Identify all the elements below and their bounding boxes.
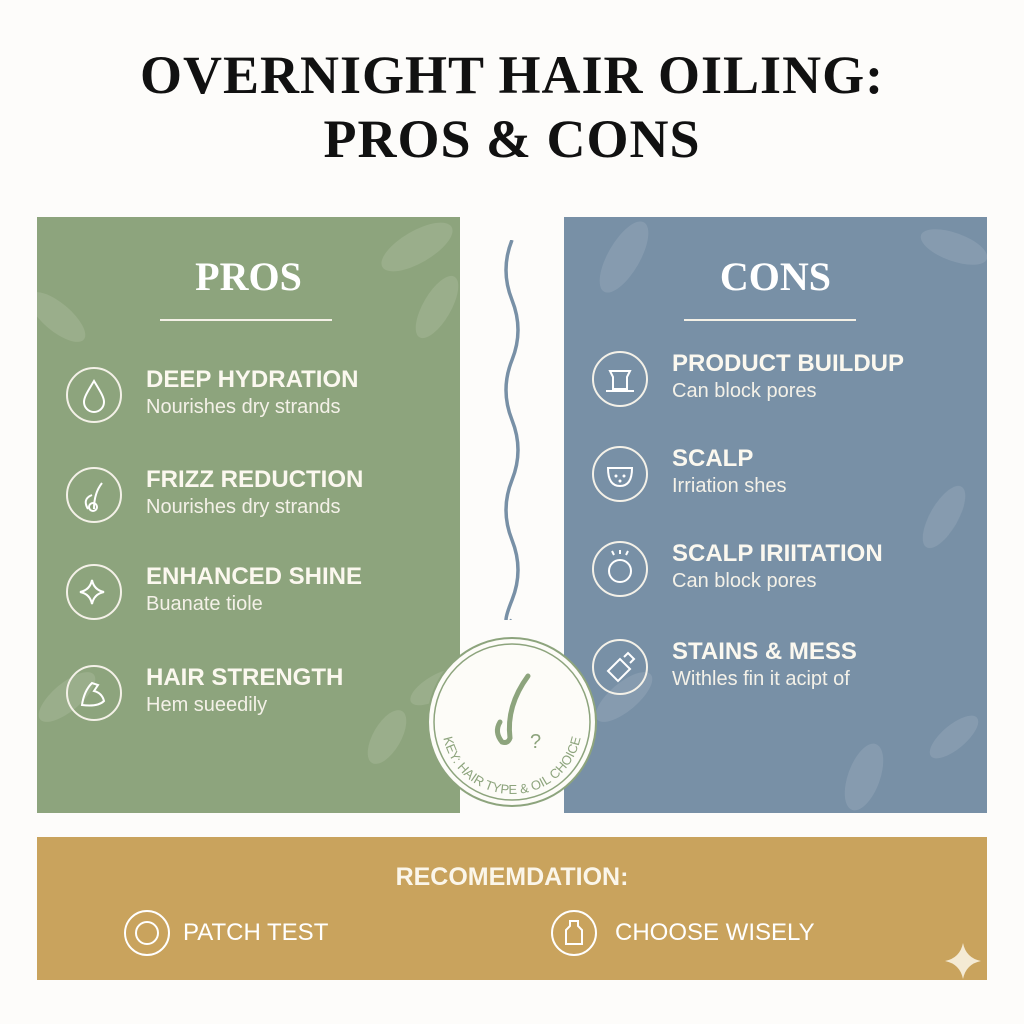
item: enhanced shine [66, 563, 362, 620]
item: product buildup: PRODUCT BUILDUP [672, 350, 904, 377]
panel: cons [564, 217, 987, 813]
item: frizz reduction: Nourishes dry strands [146, 496, 341, 518]
icon: sparkle corner [945, 943, 981, 979]
item: deep hydration: DEEP HYDRATION [146, 366, 358, 393]
title [140, 45, 884, 169]
icon: sparkle [66, 564, 122, 620]
item: scalp irritation: Can block pores [672, 570, 817, 592]
item: scalp: Irriation shes [672, 475, 786, 497]
title: OVERNIGHT HAIR OILING: [140, 45, 884, 105]
item: hair strength: Hem sueedily [146, 694, 267, 716]
title: PROS & CONS [323, 109, 701, 169]
icon: scalp [592, 446, 648, 502]
item: patch test: PATCH TEST [183, 919, 328, 946]
item: scalp [592, 445, 786, 502]
heading: cons: CONS [720, 254, 831, 299]
item: hair strength: HAIR STRENGTH [146, 664, 343, 691]
item: stains & mess: Withles fin it acipt of [672, 668, 850, 690]
icon: bottle spill [592, 639, 648, 695]
icon: jar [592, 351, 648, 407]
icon: target [124, 910, 170, 956]
decorative leaves [596, 222, 987, 810]
item: product buildup: Can block pores [672, 380, 817, 402]
decorative leaves [37, 222, 458, 764]
panel: pros [37, 217, 460, 813]
heading: recommendation: RECOMEMDATION: [396, 863, 628, 891]
badge: key hair type & oil choice: ? [530, 731, 541, 753]
icon: hair strand [66, 467, 122, 523]
item: choose wisely [436, 644, 815, 956]
item: scalp: SCALP [672, 445, 753, 472]
item: frizz reduction [66, 466, 363, 523]
item: stains & mess: STAINS & MESS [672, 638, 857, 665]
item: hair strength [66, 664, 343, 721]
item: enhanced shine: Buanate tiole [146, 593, 263, 615]
heading: pros: PROS [195, 254, 302, 299]
item: scalp irritation: SCALP IRIITATION [672, 540, 883, 567]
panel: recommendation [37, 837, 987, 980]
item: deep hydration [66, 366, 358, 423]
item: product buildup [592, 350, 904, 407]
badge: key hair type & oil choice: KEY: HAIR TYPE & OIL CHOICE [444, 736, 580, 794]
item: choose wisely: CHOOSE WISELY [615, 919, 815, 946]
icon: arm [66, 665, 122, 721]
item: deep hydration: Nourishes dry strands [146, 396, 341, 418]
item: stains & mess [592, 638, 857, 695]
badge: key hair type & oil choice [429, 637, 597, 807]
wavy divider [504, 240, 520, 620]
item: enhanced shine: ENHANCED SHINE [146, 563, 362, 590]
icon: bottle [436, 644, 597, 956]
icon: water drop [66, 367, 122, 423]
item: patch test [124, 910, 328, 956]
item: frizz reduction: FRIZZ REDUCTION [146, 466, 363, 493]
item: scalp irritation [592, 540, 883, 597]
icon: head [592, 541, 648, 597]
